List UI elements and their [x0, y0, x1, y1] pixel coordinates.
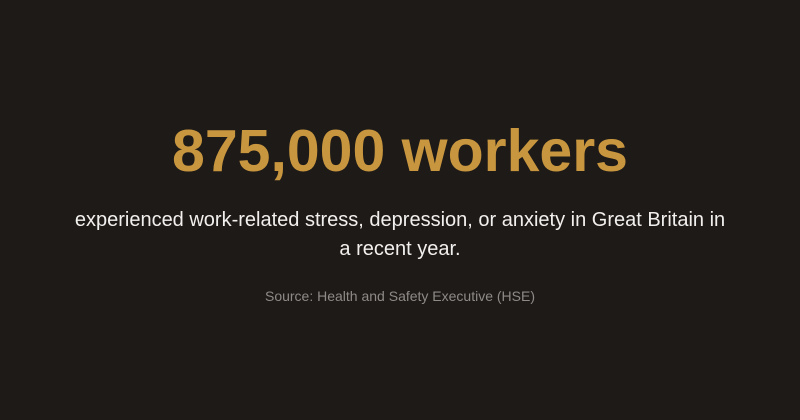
description text: experienced work-related stress, depression, or anxiety in Great Britain in a recent year. — [75, 209, 725, 260]
source: Source: Health and Safety Executive (HSE) — [265, 288, 535, 304]
title: 875,000 workers — [172, 118, 628, 184]
